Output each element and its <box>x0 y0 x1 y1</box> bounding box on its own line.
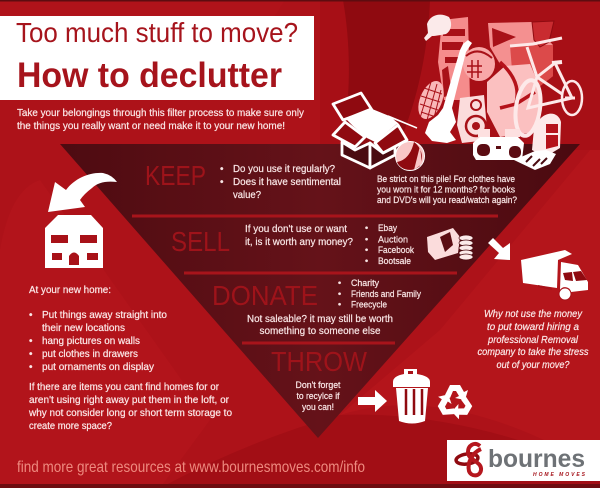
keep label: KEEP <box>145 160 206 191</box>
intro text: Take your belongings through this filter process to make sure only <box>17 107 305 119</box>
donate label: DONATE <box>212 280 318 311</box>
icon: dustbin <box>393 369 430 424</box>
keep questions <box>220 164 341 201</box>
text block: removal company: professional Removal <box>487 335 579 346</box>
icon: removal van <box>521 250 588 300</box>
icon: curved arrow to house <box>48 173 117 212</box>
intro text <box>17 107 305 132</box>
keep questions: Do you use it regularly? <box>233 164 335 175</box>
keep questions: value? <box>233 190 261 201</box>
throw note: you can! <box>302 402 334 412</box>
tennis racket <box>413 77 449 123</box>
title box <box>0 16 314 100</box>
donate note: Not saleable? it may still be worth <box>247 314 393 325</box>
boombox <box>473 129 524 160</box>
text block: removal company: to put toward hiring a <box>487 322 579 333</box>
helmet <box>463 47 495 81</box>
logo mark <box>455 444 481 475</box>
donate options: Charity <box>351 278 379 288</box>
keep questions: Does it have sentimental <box>233 177 341 188</box>
speaker <box>457 95 488 143</box>
icon: clutter pile <box>413 15 582 170</box>
donate options: • <box>338 289 341 299</box>
new home list: put clothes in drawers <box>42 349 138 360</box>
panel: sell <box>171 223 414 266</box>
callout: be strict: you worn it for 12 months? for books <box>377 184 515 194</box>
sell options: • <box>365 245 368 255</box>
throw note <box>296 380 341 412</box>
storage advice: aren't using right away put them in the loft, or <box>29 395 230 406</box>
text block: removal company: company to take the stress <box>478 347 588 358</box>
monitor <box>488 22 553 90</box>
donate options: • <box>338 278 341 288</box>
sell options <box>365 223 414 266</box>
icon: recycle symbol <box>434 385 475 422</box>
divider lines <box>132 214 498 344</box>
text block: at your new home <box>28 285 232 432</box>
donate options <box>338 278 421 310</box>
keep questions: • <box>220 164 224 175</box>
new home list: their new locations <box>42 323 125 334</box>
cap <box>424 15 451 41</box>
sell label: SELL <box>171 226 230 257</box>
donate note: something to someone else <box>260 326 381 337</box>
intro text: the things you really want or need make it to your new home! <box>17 120 285 132</box>
throw label: THROW <box>271 346 368 377</box>
trainers <box>514 150 556 170</box>
donate options: Friends and Family <box>351 289 421 299</box>
chair <box>438 17 470 100</box>
trophy <box>532 21 554 47</box>
new home list: put ornaments on display <box>42 362 154 373</box>
sell question <box>245 224 353 248</box>
storage advice: If there are items you cant find homes for or <box>29 382 220 393</box>
throw note: to recylce if <box>296 391 340 401</box>
sell options: • <box>365 223 368 233</box>
donate options: • <box>338 300 341 310</box>
donate options: Freecycle <box>351 300 387 310</box>
sell options: Bootsale <box>378 256 411 266</box>
callout: be strict <box>377 174 517 205</box>
sell options: • <box>365 256 368 266</box>
logo wordmark: bournes <box>488 445 585 473</box>
icon: house <box>45 215 103 268</box>
panel: throw <box>271 346 368 412</box>
icon: beach ball <box>396 142 424 170</box>
small rucksack <box>532 114 561 157</box>
bicycle <box>510 38 582 137</box>
storage advice <box>28 382 232 432</box>
new home list: • <box>29 362 33 373</box>
new home list: • <box>29 349 33 360</box>
new home list <box>29 310 167 373</box>
text block: at your new home: At your new home: <box>29 285 111 296</box>
sell options: Ebay <box>378 223 397 233</box>
heading: How to declutter <box>17 56 282 95</box>
backpack <box>487 62 541 137</box>
sell options: • <box>365 234 368 244</box>
text block: removal company <box>478 309 588 371</box>
icon: money and coins <box>427 228 473 260</box>
filter triangle <box>60 144 580 438</box>
new home list: • <box>29 310 33 321</box>
title: too much stuff: Too much stuff to move? <box>16 17 298 48</box>
icon: open box <box>333 93 417 168</box>
arrow: to bin <box>358 390 387 412</box>
sell options: Facebook <box>378 245 414 255</box>
callout: be strict: Be strict on this pile! For clothes have <box>377 174 515 184</box>
guitar <box>425 40 472 143</box>
storage advice: create more space? <box>29 421 112 432</box>
arrow: to removal van <box>488 238 510 260</box>
new home list: • <box>29 336 33 347</box>
storage advice: why not consider long or short term storage to <box>28 408 232 419</box>
logo panel <box>447 440 600 481</box>
keep questions: • <box>220 177 224 188</box>
logo tagline: HOME MOVES <box>533 472 586 478</box>
panel: keep <box>145 160 341 201</box>
callout: be strict: and DVD's will you read/watch again? <box>377 195 517 205</box>
sell question: If you don't use or want <box>245 224 347 235</box>
sell question: it, is it worth any money? <box>245 237 353 248</box>
panel: donate <box>212 278 421 337</box>
donate note <box>247 314 393 337</box>
footer link: find more great resources at www.bournesmoves.com/info <box>17 459 365 476</box>
new home list: Put things away straight into <box>42 310 167 321</box>
sell options: Auction <box>378 234 408 244</box>
new home list: hang pictures on walls <box>42 336 140 347</box>
throw note: Don't forget <box>296 380 341 390</box>
text block: removal company: out of your move? <box>496 360 570 371</box>
text block: removal company: Why not use the money <box>484 309 583 320</box>
